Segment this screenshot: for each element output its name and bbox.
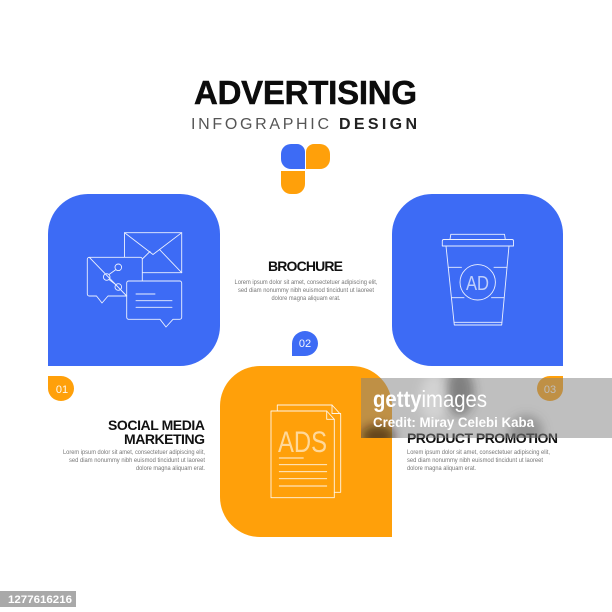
badge 03	[537, 376, 563, 401]
text block: brochure: Lorem ipsum dolor sit amet, consectetuer adipiscing elit,	[234, 279, 378, 286]
ADS label: ADS	[278, 426, 327, 459]
text block: brochure	[234, 258, 378, 302]
image id tag	[0, 591, 76, 607]
watermark band	[361, 378, 612, 438]
text block: brochure: sed diam nonummy nibh euismod tincidunt ut laoreet	[238, 287, 374, 294]
title: ADVERTISING	[194, 74, 417, 111]
text block: product promotion: Lorem ipsum dolor sit amet, consectetuer adipiscing elit,	[407, 449, 550, 456]
badge 03: 03	[544, 384, 556, 396]
panel: product promotion	[392, 194, 563, 366]
badge 02	[292, 331, 318, 356]
watermark logo text: gettyimages	[373, 386, 487, 412]
text block: social media marketing: Lorem ipsum dolor sit amet, consectetuer adipiscing elit,	[63, 449, 205, 456]
watermark credit text: Credit: Miray Celebi Kaba	[373, 415, 534, 430]
panel background	[392, 194, 563, 366]
text block: brochure: dolore magna aliquam erat.	[272, 295, 341, 302]
text block: product promotion: dolore magna aliquam erat.	[407, 465, 476, 472]
logo mark	[281, 144, 330, 194]
icon: ads document	[271, 405, 341, 498]
badge 02: 02	[299, 338, 311, 350]
badge 01	[48, 376, 74, 401]
text block: social media marketing: SOCIAL MEDIA	[108, 417, 205, 433]
text block: product promotion: sed diam nonummy nibh euismod tincidunt ut laoreet	[407, 457, 543, 464]
text block: social media marketing: MARKETING	[124, 431, 205, 447]
text block: product promotion: PRODUCT PROMOTION	[407, 430, 558, 446]
subtitle: INFOGRAPHIC	[191, 116, 329, 133]
panel: social media	[48, 194, 220, 366]
subtitle: DESIGN	[339, 116, 417, 133]
AD label: AD	[466, 273, 489, 295]
image id tag: 1277616216	[8, 594, 72, 606]
icon: coffee cup with AD	[442, 234, 514, 325]
text block: product promotion	[407, 430, 558, 472]
text block: brochure: BROCHURE	[268, 258, 343, 274]
subtitle	[191, 116, 417, 133]
text block: social media marketing: dolore magna aliquam erat.	[136, 465, 205, 472]
panel: brochure	[220, 366, 392, 537]
badge 01: 01	[56, 384, 68, 396]
icon: envelope and chat bubbles	[87, 233, 182, 327]
text block: social media marketing	[63, 417, 205, 472]
text block: social media marketing: sed diam nonummy nibh euismod tincidunt ut laoreet	[69, 457, 205, 464]
panel background	[220, 366, 392, 537]
panel background	[48, 194, 220, 366]
